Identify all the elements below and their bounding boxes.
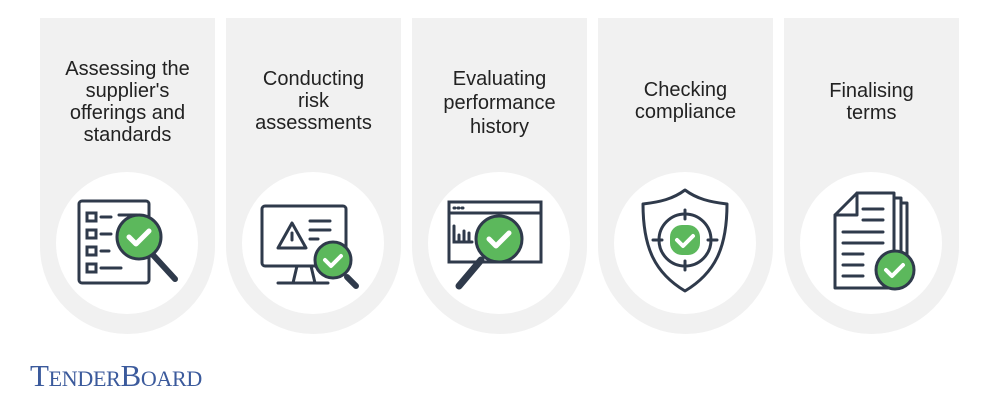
icon: documents (800, 172, 942, 314)
heading (635, 79, 736, 123)
heading: history (470, 116, 529, 138)
heading (65, 58, 190, 146)
panel: assessing offerings (40, 18, 215, 334)
heading: compliance (635, 101, 736, 123)
heading: offerings and (70, 102, 185, 124)
heading: terms (846, 102, 896, 124)
panel: risk assessments (226, 18, 401, 334)
logo: TenderBoard (30, 358, 202, 393)
heading: Evaluating (453, 68, 546, 90)
heading: supplier's (86, 80, 169, 102)
icon: checklist with magnifier (56, 172, 198, 314)
heading: performance (443, 92, 556, 114)
heading: assessments (255, 112, 372, 134)
heading: Conducting (263, 68, 364, 90)
heading (255, 68, 372, 134)
panel: finalising terms (784, 18, 959, 334)
panel: compliance (598, 18, 773, 334)
heading: Checking (644, 79, 727, 101)
heading (443, 68, 556, 138)
icon: browser chart (428, 172, 570, 314)
heading: risk (298, 90, 329, 112)
icon: monitor warning (242, 172, 384, 314)
heading (829, 80, 914, 124)
heading: Finalising (829, 80, 914, 102)
heading: Assessing the (65, 58, 190, 80)
icon: shield target (614, 172, 756, 314)
panel: performance history (412, 18, 587, 334)
heading: standards (84, 124, 171, 146)
